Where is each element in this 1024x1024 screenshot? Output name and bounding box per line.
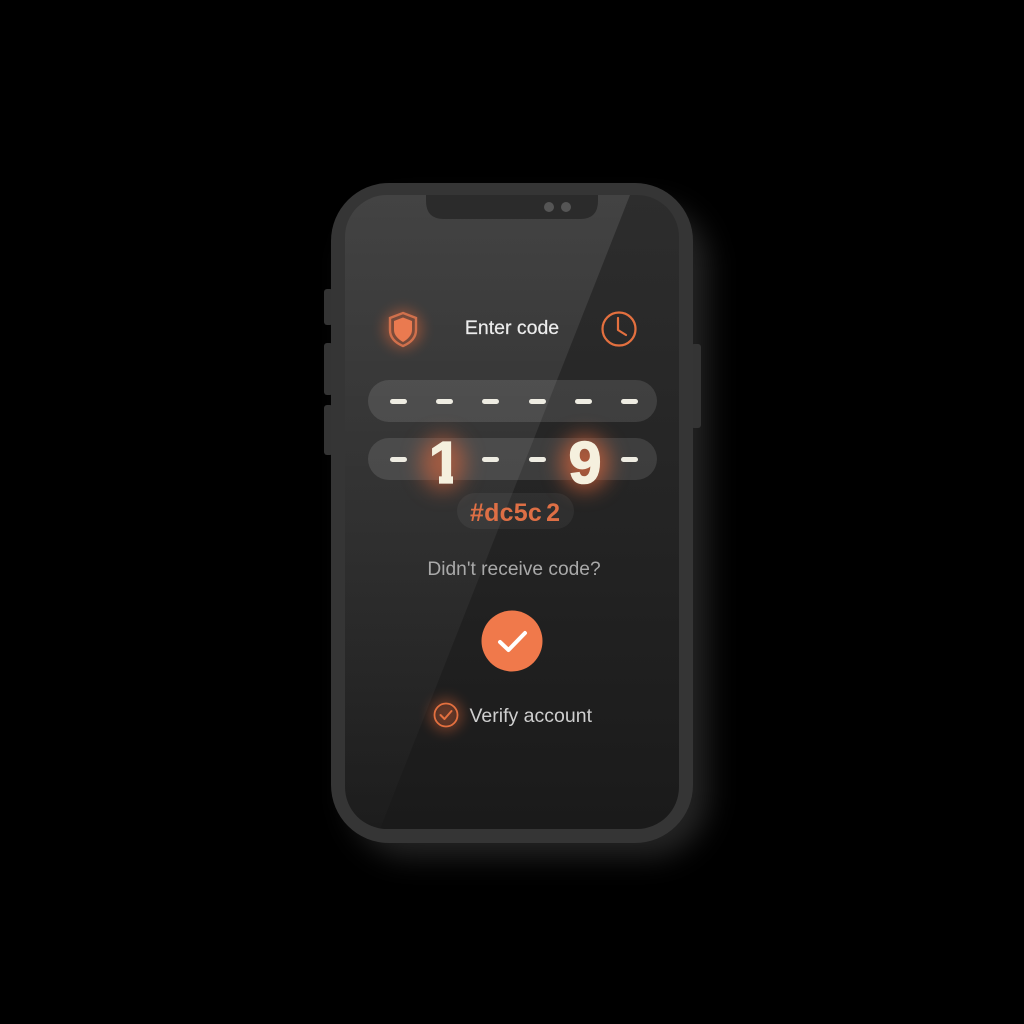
phone glow shadow xyxy=(350,205,708,857)
digit 1: 1 xyxy=(429,430,461,496)
verify label: Verify account xyxy=(470,705,593,727)
digit glows xyxy=(421,436,609,490)
notch xyxy=(426,195,598,219)
verify row xyxy=(429,698,593,732)
screen xyxy=(345,195,679,829)
phone xyxy=(324,183,701,843)
hash tag pill xyxy=(457,493,574,529)
side buttons xyxy=(324,289,701,455)
icon: small check circle xyxy=(429,698,463,732)
dashes xyxy=(390,457,638,462)
code field: partially entered xyxy=(368,430,657,496)
screen glare xyxy=(345,195,630,650)
icon: shield xyxy=(383,309,423,349)
digit 9: 9 xyxy=(569,430,601,496)
camera dots xyxy=(544,202,571,212)
confirm button xyxy=(482,610,542,672)
header row xyxy=(383,309,636,349)
hash tag pill: #dc5c 2 xyxy=(470,499,560,527)
heading: enter code: Enter code xyxy=(465,317,559,339)
icon: check xyxy=(500,633,525,650)
code field: empty xyxy=(368,380,657,422)
resend prompt: Didn't receive code? xyxy=(427,559,601,580)
icon: clock xyxy=(602,312,636,346)
phone body xyxy=(331,183,693,843)
placeholder dashes xyxy=(390,399,638,404)
